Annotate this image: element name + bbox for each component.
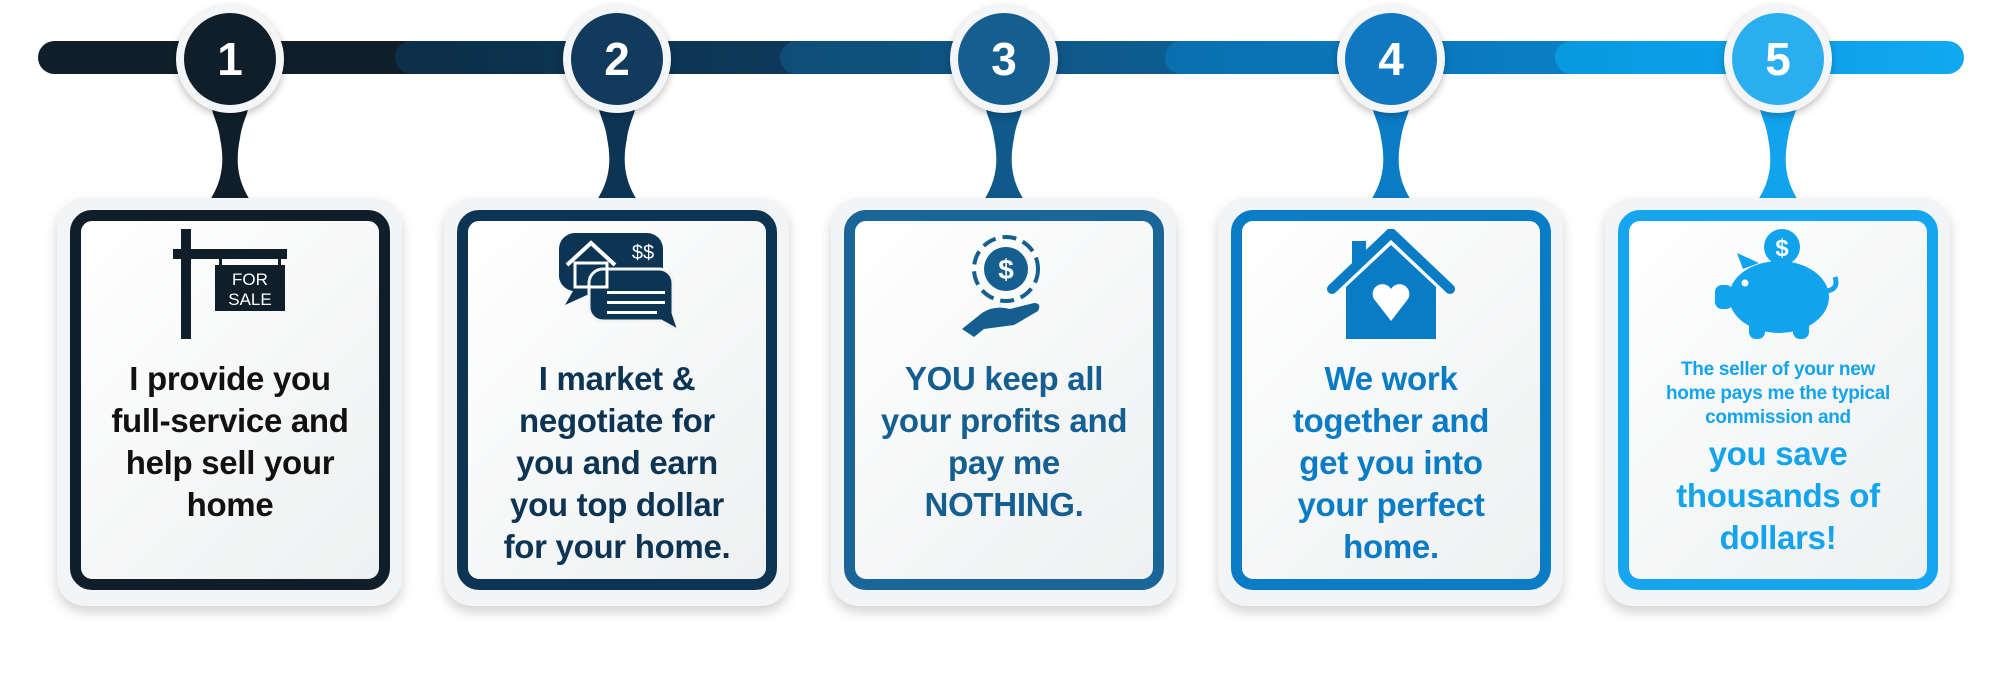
icon: house chat bubbles	[559, 233, 676, 328]
text 5: home pays me the typical	[1666, 383, 1890, 404]
text 1	[111, 360, 349, 523]
step 3	[826, 4, 1181, 617]
number badge 4	[1337, 5, 1445, 113]
connector stem 2	[598, 110, 636, 198]
text 3: YOU keep all	[905, 360, 1103, 397]
connector stem 5	[1759, 110, 1797, 198]
text 5: The seller of your new	[1681, 359, 1875, 380]
icon: house chat bubbles: $$	[632, 242, 654, 264]
text 5	[1666, 359, 1890, 428]
icon: for sale sign: FOR	[232, 270, 268, 289]
text 2: you top dollar	[510, 486, 724, 523]
text 2: I market &	[539, 360, 695, 397]
timeline bar	[38, 41, 1964, 74]
number badge 5	[1724, 5, 1832, 113]
text 5: commission and	[1705, 407, 1851, 428]
number badge 2: 2	[604, 33, 630, 85]
text 1: full-service and	[111, 402, 349, 439]
card 5	[1605, 198, 1950, 606]
text 1: I provide you	[129, 360, 331, 397]
card 3	[831, 198, 1176, 606]
icon: for sale sign: SALE	[228, 290, 272, 309]
text 2: for your home.	[504, 528, 730, 565]
text 3	[881, 360, 1127, 523]
text 2: you and earn	[516, 444, 718, 481]
text 5 emphasis	[1676, 435, 1880, 556]
text 4: your perfect	[1297, 486, 1485, 523]
step 2	[439, 4, 794, 617]
number badge 4: 4	[1378, 33, 1404, 85]
number badge 2	[563, 5, 671, 113]
number badge 3	[950, 5, 1058, 113]
text 2	[504, 360, 730, 565]
text 2: negotiate for	[519, 402, 715, 439]
step 1	[52, 4, 407, 617]
icon: house with heart	[1327, 229, 1455, 339]
text 4: home.	[1343, 528, 1439, 565]
text 4	[1293, 360, 1489, 565]
number badge 1	[176, 5, 284, 113]
text 4: We work	[1324, 360, 1458, 397]
icon: hand with dollar coin: $	[998, 254, 1014, 285]
icon: for sale sign	[173, 229, 287, 339]
text 5 emphasis: you save	[1709, 435, 1847, 472]
icon: piggy bank: $	[1775, 235, 1789, 262]
text 3: pay me	[948, 444, 1060, 481]
text 3: your profits and	[881, 402, 1127, 439]
text 5 emphasis: thousands of	[1676, 477, 1880, 514]
connector stem 3	[985, 110, 1023, 198]
number badge 1: 1	[217, 33, 243, 85]
text 1: help sell your	[126, 444, 334, 481]
card 1	[57, 198, 402, 606]
icon: piggy bank	[1715, 229, 1838, 339]
text 1: home	[187, 486, 273, 523]
number badge 3: 3	[991, 33, 1017, 85]
text 4: together and	[1293, 402, 1489, 439]
icon: hand with dollar coin	[962, 235, 1040, 337]
text 4: get you into	[1299, 444, 1483, 481]
step 4	[1213, 4, 1568, 617]
text 5 emphasis: dollars!	[1720, 519, 1836, 556]
text 3: NOTHING.	[925, 486, 1083, 523]
card 4	[1218, 198, 1563, 606]
connector stem 1	[211, 110, 249, 198]
connector stem 4	[1372, 110, 1410, 198]
number badge 5: 5	[1765, 33, 1791, 85]
card 2	[444, 198, 789, 606]
step 5	[1600, 4, 1955, 617]
